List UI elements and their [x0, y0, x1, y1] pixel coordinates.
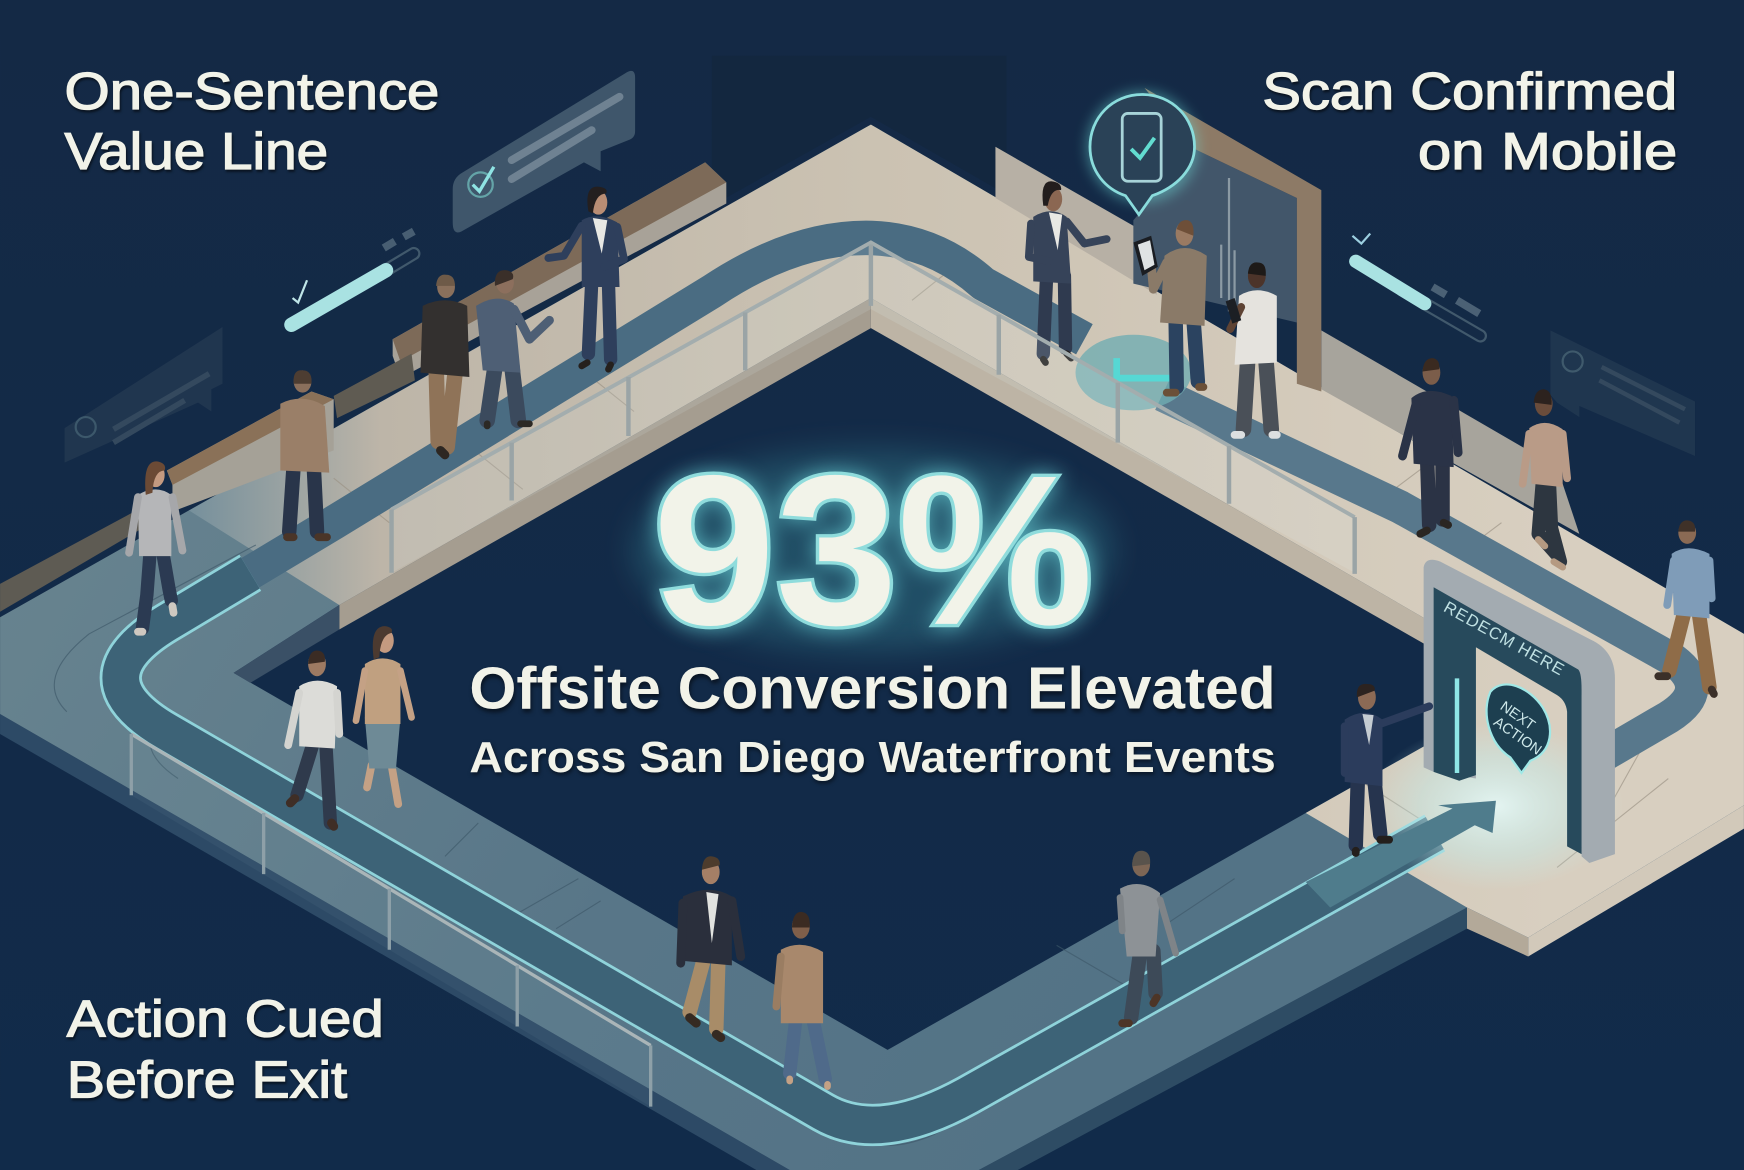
person: man dark jacket	[420, 275, 469, 455]
glass doors	[1133, 149, 1297, 323]
lower bench	[167, 391, 334, 512]
person: man navy suit walking	[1403, 358, 1458, 534]
deck outer side faces	[0, 714, 1744, 1170]
left glass run	[392, 242, 871, 573]
right route	[1162, 395, 1692, 756]
next action bubble	[1487, 684, 1550, 773]
gate sign text: REDECM HERE	[1441, 597, 1568, 680]
gate light strip	[1455, 678, 1459, 773]
person: man white shirt with phone	[1226, 262, 1277, 435]
benches and planters	[0, 162, 726, 612]
person: man grey suit	[476, 270, 549, 426]
person: man white shirt walking	[288, 651, 339, 826]
person: man tan jacket	[280, 370, 329, 537]
person: suited man pointing at gate	[1345, 684, 1429, 853]
progress bar: right	[1352, 234, 1480, 336]
route stripes	[121, 238, 1692, 1125]
heading: one-sentence value line	[65, 63, 439, 181]
heading: one-sentence value line: One-Sentence	[65, 63, 439, 121]
concrete wall	[995, 147, 1157, 295]
person: woman navy suit at door	[1029, 181, 1107, 363]
lower glass railing	[131, 734, 651, 1107]
progress bar: left	[291, 231, 414, 325]
heading: action cued before exit: Action Cued	[67, 991, 384, 1049]
upper bench	[393, 162, 726, 378]
next action bubble: NEXT	[1497, 699, 1538, 734]
right glass run	[871, 242, 1355, 573]
redeem gate	[1424, 560, 1615, 863]
faint chat card: left	[65, 327, 222, 463]
upper planter	[334, 354, 415, 418]
heading: one-sentence value line: Value Line	[65, 123, 328, 181]
stat glow	[634, 450, 1112, 651]
gate dark face	[1434, 587, 1582, 854]
person: woman navy suit	[548, 187, 624, 369]
person: woman skirt walking	[356, 626, 412, 804]
heading: action cued before exit	[67, 991, 384, 1110]
phone confirmation bubble	[1087, 91, 1198, 215]
inner side faces	[234, 298, 1446, 683]
stat number: 93%	[653, 432, 1093, 670]
stat subtitle: Across San Diego Waterfront Events	[469, 734, 1276, 782]
stat title: Offsite Conversion Elevated	[469, 656, 1276, 721]
gate silver arch	[1424, 560, 1615, 863]
heading: scan confirmed on mobile: on Mobile	[1418, 123, 1677, 181]
faint chat card: right	[1550, 330, 1695, 456]
person: man tan jacket with tablet	[1133, 220, 1207, 393]
heading: action cued before exit: Before Exit	[67, 1052, 348, 1110]
back wall with door	[995, 88, 1579, 534]
back wall panel	[712, 56, 1007, 206]
heading: scan confirmed on mobile	[1262, 63, 1677, 181]
next action bubble: ACTION	[1490, 714, 1544, 759]
floor scan glow	[1076, 335, 1191, 410]
person: woman pink shirt walking	[1523, 389, 1567, 567]
person: woman tan jacket jeans	[776, 912, 828, 1087]
door frame	[1144, 88, 1321, 391]
upper route	[211, 238, 1084, 596]
person: man blue shirt walking	[1658, 520, 1714, 694]
paving joints	[54, 256, 1668, 1146]
redeem arrow with glow	[1306, 723, 1624, 908]
person: man grey tee walking	[1120, 851, 1176, 1023]
beige surface	[189, 125, 1744, 938]
lower planter	[0, 506, 167, 612]
central statistic	[469, 432, 1276, 782]
heading: scan confirmed on mobile: Scan Confirmed	[1262, 63, 1677, 121]
upper glass railing	[392, 242, 1355, 574]
person: man dark blazer khakis	[681, 856, 741, 1038]
person: woman grey top	[129, 461, 182, 632]
floating chat card: top	[453, 71, 635, 232]
glowing lower route	[121, 573, 1435, 1125]
